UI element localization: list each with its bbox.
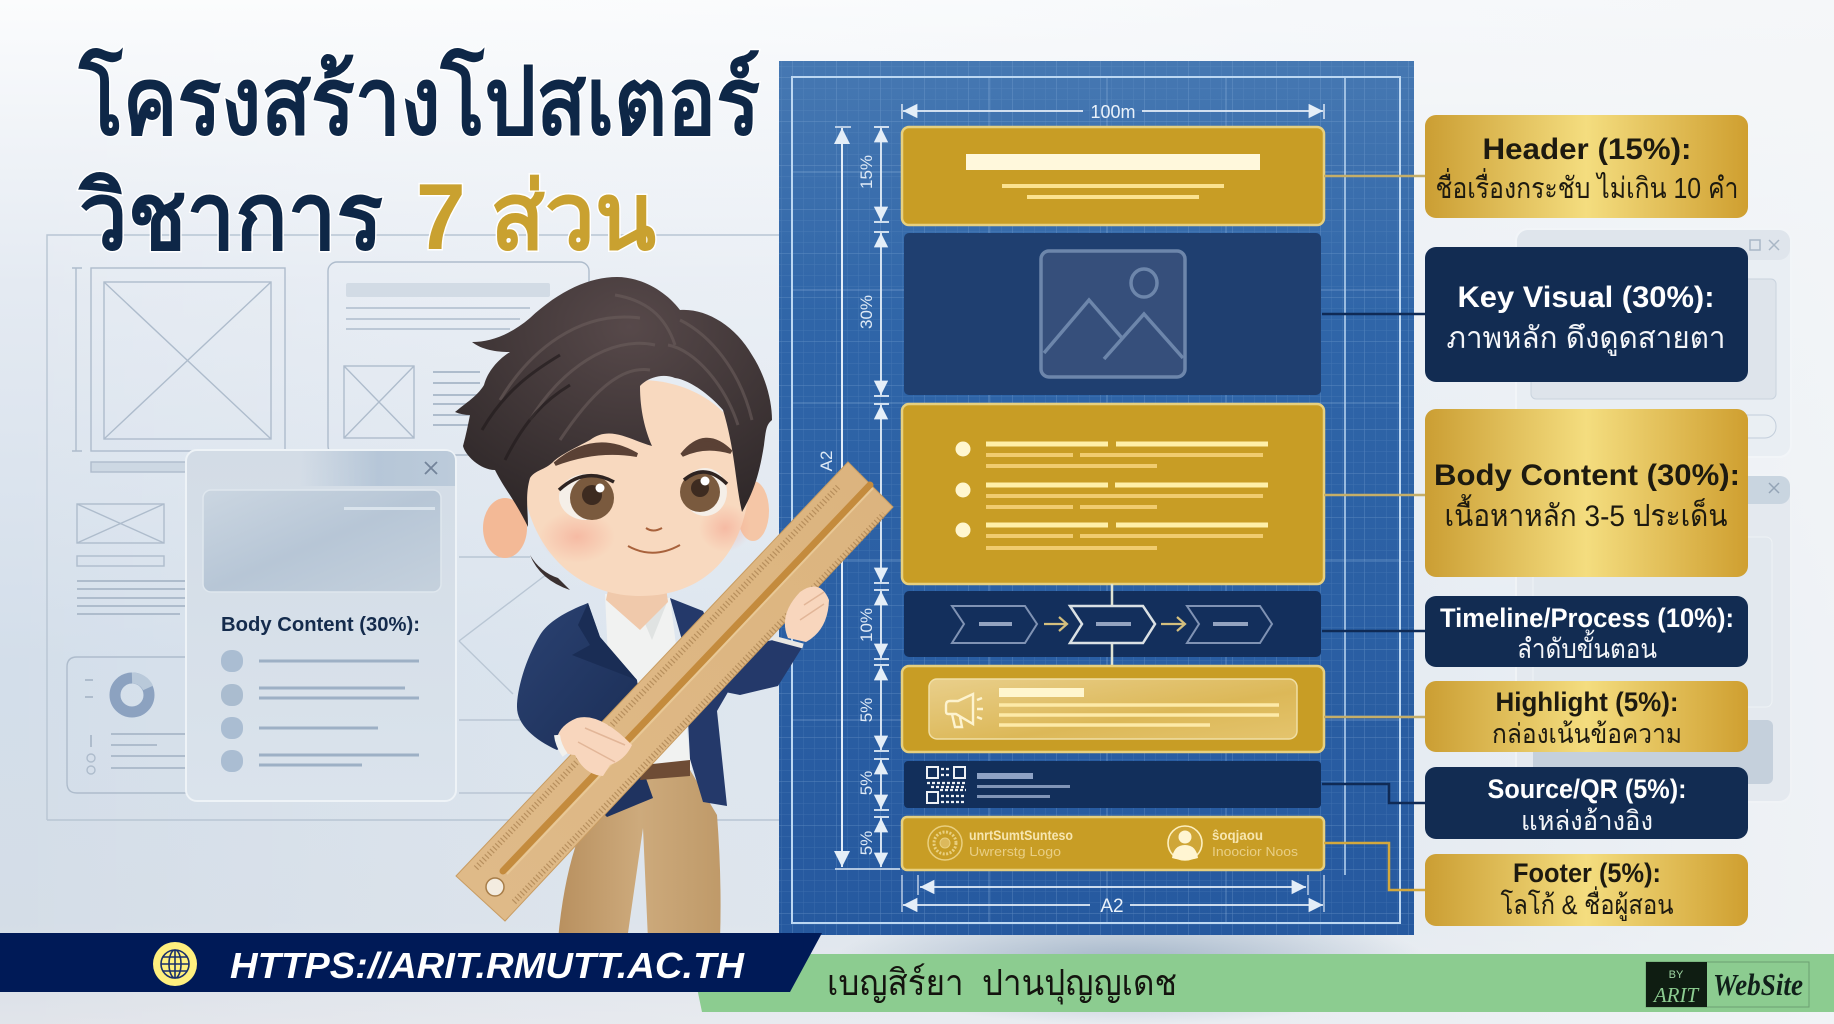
section: footer block: Inoocior Noos	[1212, 844, 1299, 859]
icon: QR code	[927, 767, 966, 803]
callout: timeline	[1425, 596, 1748, 667]
face	[522, 380, 750, 596]
dimension labels: 10%	[857, 608, 876, 642]
logo: ARIT WebSite: ARIT	[1652, 983, 1699, 1007]
callout: key visual	[1425, 247, 1748, 382]
ruler	[456, 462, 893, 921]
glass card: Body Content	[186, 450, 456, 801]
callout: source/QR	[1425, 767, 1748, 839]
section: footer block: unrtSumtSunteso	[969, 827, 1073, 843]
dimension: A2 horizontal: A2	[1100, 896, 1124, 917]
callout: body content: Body Content (30%):	[1434, 459, 1740, 492]
dimension: A2 vertical	[817, 127, 900, 869]
nose and mouth	[628, 528, 680, 553]
card heading: Body Content (30%):	[221, 614, 420, 636]
section: timeline block	[904, 584, 1321, 666]
eyebrows	[555, 440, 731, 464]
green name bar	[690, 954, 1834, 1012]
section: source / QR block	[904, 761, 1321, 808]
section: footer block: ŝoqjaou	[1212, 827, 1263, 843]
jacket sleeve	[700, 640, 803, 695]
callout: highlight	[1425, 681, 1748, 752]
section: footer block: Uwrerstg Logo	[969, 844, 1061, 859]
character: boy holding ruler	[455, 277, 893, 940]
section: header block	[902, 127, 1324, 225]
section: highlight block	[902, 666, 1324, 752]
icon: megaphone	[946, 694, 983, 727]
callout: body content	[1425, 409, 1748, 577]
blue URL bar	[0, 933, 822, 992]
logo: ARIT WebSite	[1646, 962, 1809, 1007]
section: body content block	[902, 404, 1324, 584]
callout: header: ชื่อเรื่องกระชับ ไม่เกิน 10 คำ	[1436, 168, 1738, 205]
shirt	[605, 594, 692, 770]
dimension: section heights	[874, 127, 889, 867]
callout: timeline: Timeline/Process (10%):	[1440, 603, 1734, 633]
callout: header	[1425, 115, 1748, 218]
wireframe backdrop: left	[47, 235, 779, 820]
callout: footer	[1425, 854, 1748, 926]
title: วิชาการ	[78, 164, 383, 269]
dimension labels: 15%	[857, 155, 876, 189]
callout: body content: เนื้อหาหลัก 3-5 ประเด็น	[1444, 494, 1728, 533]
dimension labels: 5%	[857, 698, 876, 722]
callout: source/QR: แหล่งอ้างอิง	[1521, 806, 1653, 836]
panel: blueprint	[779, 61, 1414, 935]
callout: footer: Footer (5%):	[1513, 858, 1661, 888]
wireframe backdrop: right windows	[1516, 229, 1791, 802]
icon: instructor avatar	[1168, 826, 1202, 860]
dimension: A2 vertical: A2	[817, 451, 836, 471]
dimension labels: 30%	[857, 295, 876, 329]
callout: key visual: ภาพหลัก ดึงดูดสายตา	[1446, 322, 1726, 356]
logo: ARIT WebSite: WebSite	[1713, 967, 1803, 1002]
hands	[557, 587, 829, 776]
dimension labels: 5%	[857, 771, 876, 795]
callout: footer: โลโก้ & ชื่อผู้สอน	[1500, 886, 1674, 921]
eyes	[559, 468, 727, 520]
callout: key visual: Key Visual (30%):	[1458, 281, 1714, 314]
bullet list	[221, 650, 419, 772]
dimension labels	[857, 155, 876, 855]
dimension: 100m	[902, 102, 1324, 122]
section: footer block	[902, 817, 1324, 870]
icon: globe	[153, 942, 197, 986]
legs	[558, 770, 721, 940]
title: โครงสร้างโปสเตอร์	[78, 47, 760, 154]
dimension: A2 horizontal	[902, 875, 1324, 917]
belt	[640, 760, 690, 780]
jacket	[517, 598, 803, 817]
close icon	[425, 462, 437, 474]
neck	[606, 580, 668, 630]
glass image placeholder	[203, 490, 441, 592]
icon: university seal	[928, 826, 962, 860]
dimension: 100m: 100m	[1090, 102, 1136, 122]
hair	[455, 277, 772, 590]
ears	[483, 498, 527, 558]
dimension labels: 5%	[857, 831, 876, 855]
section: key visual block	[904, 233, 1321, 395]
callout: source/QR: Source/QR (5%):	[1488, 774, 1686, 804]
logo: ARIT WebSite: BY	[1669, 969, 1684, 981]
title: 7 ส่วน	[416, 164, 656, 269]
blue URL bar: HTTPS://ARIT.RMUTT.AC.TH	[230, 945, 745, 986]
icon: image placeholder	[1041, 251, 1185, 377]
green name bar: เบญสิร์ยา ปานปุญญเดช	[827, 962, 1177, 1005]
callout: timeline: ลำดับขั้นตอน	[1517, 629, 1657, 664]
connector lines	[1322, 176, 1425, 890]
callout: highlight: Highlight (5%):	[1496, 687, 1678, 717]
callout: header: Header (15%):	[1482, 133, 1692, 166]
callout: highlight: กล่องเน้นข้อความ	[1492, 719, 1682, 749]
title	[78, 47, 760, 269]
